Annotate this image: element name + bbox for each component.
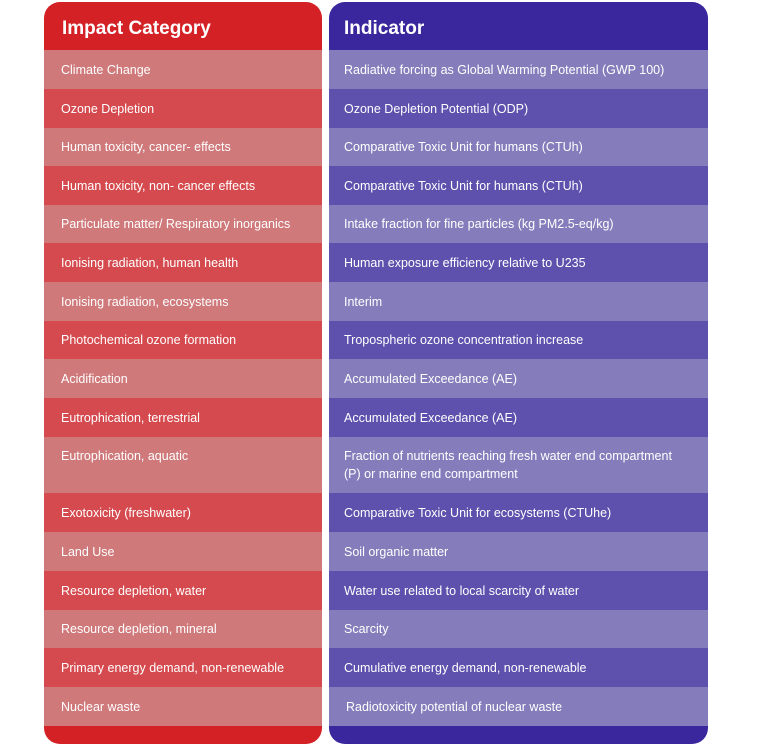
- panel: indicator: Interim: [344, 294, 382, 308]
- panel: indicator: Comparative Toxic Unit for humans (CTUh): [344, 140, 583, 154]
- panel: impact category: Ionising radiation, human health: [61, 256, 238, 270]
- panel: indicator: Radiative forcing as Global Warming Potential (GWP 100): [344, 62, 664, 76]
- panel: indicator: Accumulated Exceedance (AE): [344, 410, 517, 424]
- panel: indicator: Comparative Toxic Unit for ecosystems (CTUhe): [344, 506, 611, 520]
- panel: indicator: Soil organic matter: [344, 544, 448, 558]
- panel: impact category: Primary energy demand, non-renewable: [61, 660, 284, 674]
- heading: indicator: Indicator: [344, 18, 424, 39]
- panel: indicator: Radiotoxicity potential of nuclear waste: [346, 700, 562, 714]
- panel: impact category: Resource depletion, mineral: [61, 622, 217, 636]
- panel: indicator: [329, 2, 708, 744]
- panel: impact category: Human toxicity, non- cancer effects: [61, 178, 255, 192]
- panel: indicator: Tropospheric ozone concentration increase: [344, 333, 583, 347]
- panel: indicator: Scarcity: [344, 622, 388, 636]
- panel: impact category: Particulate matter/ Respiratory inorganics: [61, 217, 290, 231]
- panel: impact category: Land Use: [61, 544, 115, 558]
- panel: indicator: Accumulated Exceedance (AE): [344, 372, 517, 386]
- panel: indicator: Water use related to local scarcity of water: [344, 584, 579, 598]
- panel: impact category: Nuclear waste: [61, 700, 140, 714]
- panel: impact category: Eutrophication, terrestrial: [61, 410, 200, 424]
- panel: impact category: Exotoxicity (freshwater): [61, 506, 191, 520]
- panel: indicator: Cumulative energy demand, non-renewable: [344, 660, 587, 674]
- heading: impact category: Impact Category: [62, 18, 211, 39]
- panel: indicator: Comparative Toxic Unit for humans (CTUh): [344, 178, 583, 192]
- panel: impact category: Eutrophication, aquatic: [61, 449, 188, 463]
- panel: impact category: Human toxicity, cancer- effects: [61, 140, 231, 154]
- panel: impact category: Ionising radiation, ecosystems: [61, 294, 228, 308]
- panel: impact category: Acidification: [61, 372, 128, 386]
- panel: indicator: Intake fraction for fine particles (kg PM2.5-eq/kg): [344, 217, 614, 231]
- panel: impact category: Ozone Depletion: [61, 102, 154, 116]
- panel: impact category: [44, 2, 322, 744]
- panel: impact category: Climate Change: [61, 62, 151, 76]
- panel: indicator: Fraction of nutrients reaching fresh water end compartment: [344, 449, 672, 463]
- panel: impact category: Resource depletion, water: [61, 584, 206, 598]
- panel: indicator: (P) or marine end compartment: [344, 467, 518, 481]
- panel: impact category: Photochemical ozone formation: [61, 333, 236, 347]
- panel: indicator: Human exposure efficiency relative to U235: [344, 256, 586, 270]
- panel: indicator: Ozone Depletion Potential (ODP): [344, 102, 528, 116]
